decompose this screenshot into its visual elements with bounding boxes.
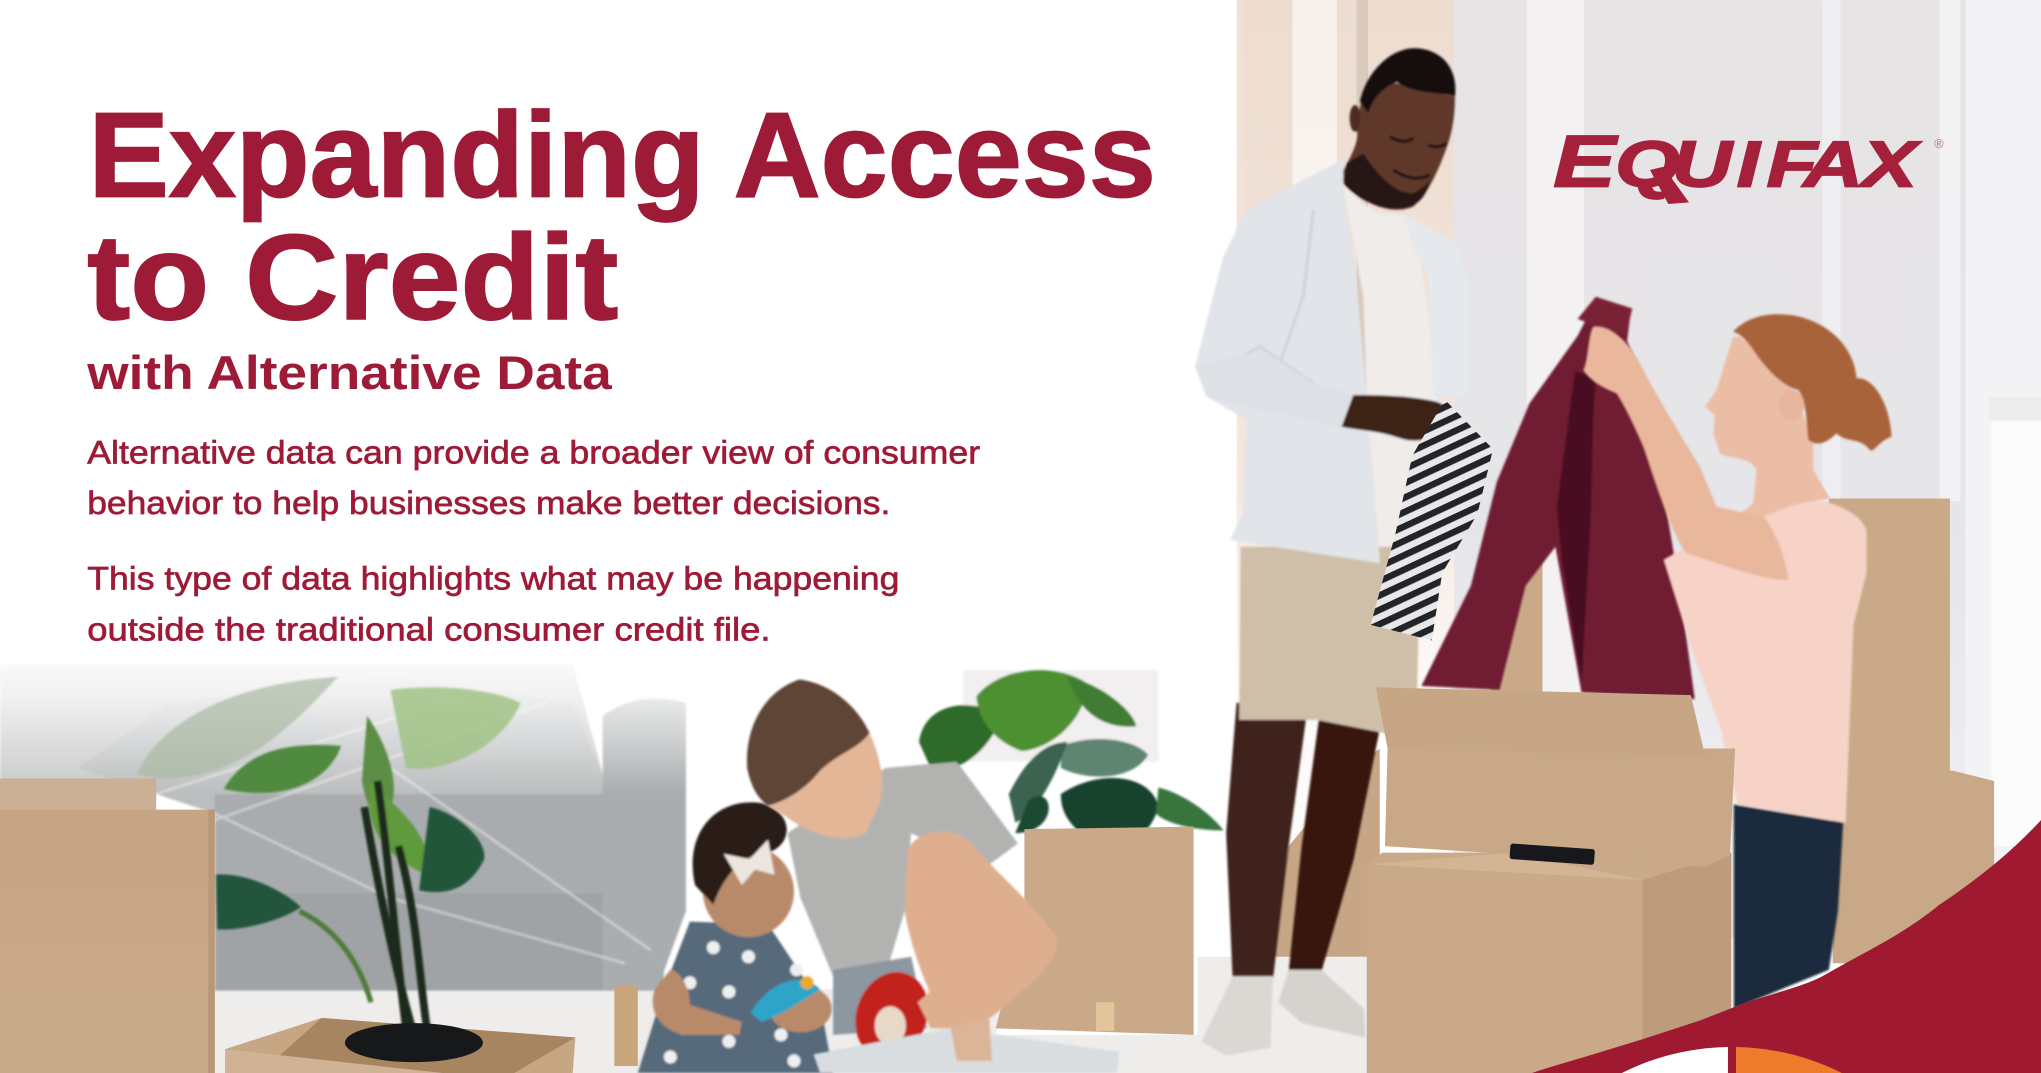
face and neck bbox=[1343, 82, 1455, 210]
hair bbox=[1360, 48, 1455, 113]
hair bbox=[693, 802, 787, 905]
leg bbox=[905, 832, 1057, 1030]
beard bbox=[1343, 153, 1430, 209]
upper body in detail coordinates bbox=[1583, 314, 1892, 580]
cardboard box: plant box bbox=[996, 827, 1194, 1035]
cuff bbox=[1578, 297, 1632, 336]
person: baby bbox=[638, 802, 833, 1073]
hand bbox=[1342, 395, 1449, 441]
logo: Equifax bbox=[1553, 121, 1944, 204]
man upper body in detail coordinates bbox=[1195, 48, 1467, 563]
bow bbox=[724, 840, 774, 885]
toy bbox=[751, 980, 820, 1022]
intro paragraph: Alternative data can provide a broader view of consumer bbox=[87, 434, 980, 470]
hair bbox=[747, 679, 870, 806]
chair leg bbox=[614, 985, 638, 1066]
title: to Credit bbox=[87, 209, 618, 345]
face bbox=[703, 846, 794, 937]
sofa under plastic bbox=[0, 664, 686, 991]
shorts bbox=[1239, 547, 1419, 739]
pink top bbox=[1664, 501, 1867, 823]
back cardboard boxes bbox=[1269, 499, 1994, 963]
logo: Equifax: E bbox=[1553, 121, 1619, 202]
subtitle: with Alternative Data bbox=[86, 347, 613, 399]
top fade over sofa bbox=[0, 644, 729, 794]
chart: partial circle emblem bbox=[1622, 1047, 1842, 1073]
floor bbox=[215, 957, 1380, 1073]
intro paragraph bbox=[87, 434, 980, 521]
person: man bbox=[1195, 48, 1467, 1056]
shorts bbox=[833, 957, 927, 1035]
jeans bbox=[1734, 804, 1843, 1009]
arms bbox=[653, 970, 742, 1035]
arm and hand bbox=[1583, 326, 1788, 580]
background: curtains bbox=[1171, 0, 1454, 1073]
shirt folds bbox=[1210, 210, 1313, 383]
title: Expanding Access bbox=[89, 87, 1156, 223]
face and neck bbox=[1705, 337, 1830, 517]
socks bbox=[1201, 976, 1273, 1056]
sleeve cuff bbox=[1195, 350, 1353, 428]
cardboard box with pot bbox=[225, 1018, 575, 1073]
face bbox=[768, 733, 882, 838]
logo: Equifax: QUIFAX bbox=[1615, 127, 1922, 201]
potted plant: right bbox=[919, 670, 1224, 859]
title bbox=[87, 87, 1156, 345]
cardboard box: left foreground bbox=[0, 778, 215, 1073]
person: boy bbox=[747, 679, 1119, 1073]
garment: striped shirt bbox=[1371, 400, 1493, 640]
logo: Equifax: ® bbox=[1934, 137, 1944, 151]
shirt bbox=[788, 761, 1018, 976]
red swoosh corner bbox=[1532, 820, 2041, 1073]
potted plant: left bbox=[137, 677, 521, 1035]
hand bbox=[918, 970, 979, 1028]
clear box bbox=[814, 1028, 1119, 1073]
second paragraph bbox=[87, 561, 899, 647]
red toy bbox=[843, 962, 940, 1069]
cardboard boxes: front stack bbox=[1367, 687, 1735, 1073]
hair and bun bbox=[1733, 314, 1892, 451]
Q tail bbox=[1650, 167, 1689, 204]
eyes and smile bbox=[1390, 137, 1447, 178]
ear bbox=[1779, 390, 1804, 420]
ear bbox=[1350, 105, 1360, 132]
shirt body bbox=[1195, 158, 1380, 563]
dress bbox=[638, 922, 833, 1073]
legs bbox=[1226, 703, 1308, 979]
second paragraph: This type of data highlights what may be happening bbox=[87, 561, 899, 597]
intro paragraph: behavior to help businesses make better decisions. bbox=[87, 485, 890, 521]
second paragraph: outside the traditional consumer credit file. bbox=[87, 611, 771, 647]
shirt right flap bbox=[1403, 213, 1467, 397]
undershirt bbox=[1343, 187, 1447, 547]
person: woman bbox=[1583, 314, 1892, 1009]
garment: burgundy shirt bbox=[1421, 297, 1695, 699]
